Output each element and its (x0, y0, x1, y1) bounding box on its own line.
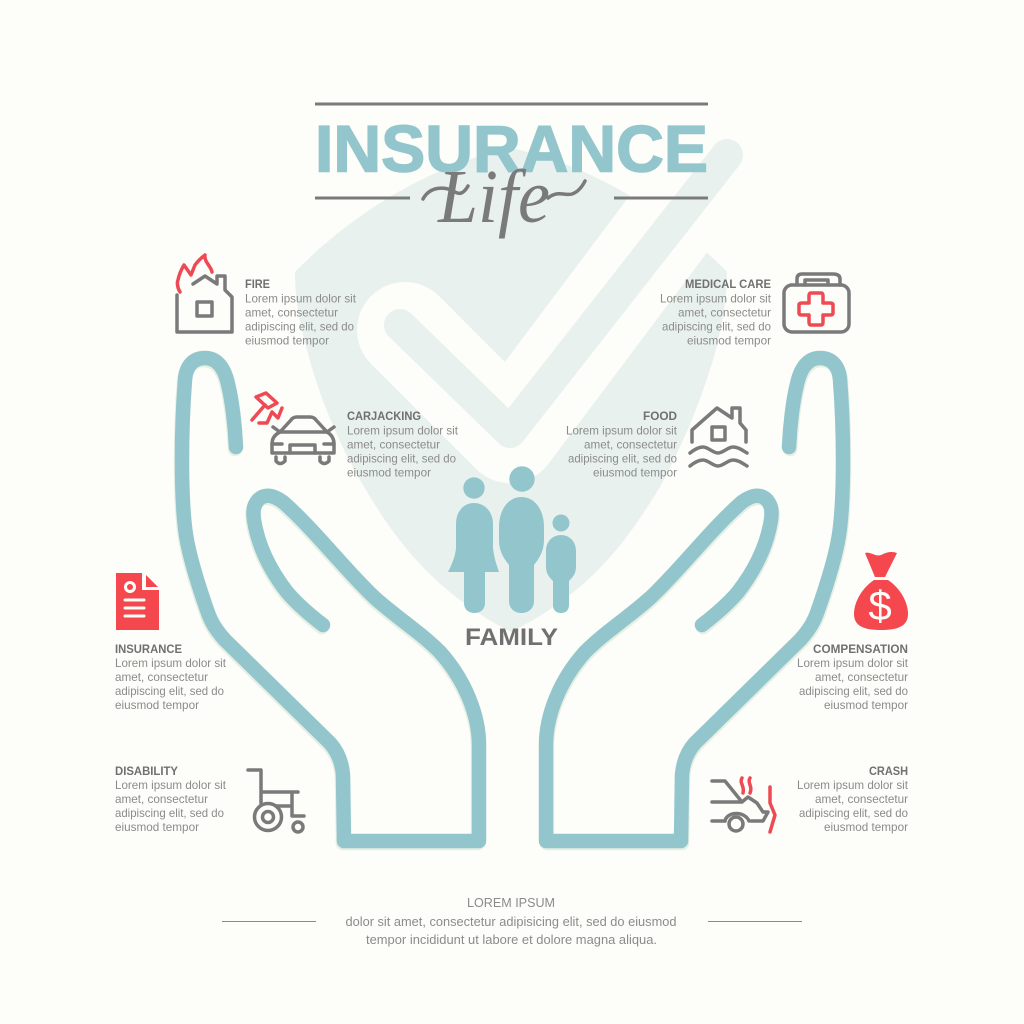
text block: compensation: Lorem ipsum dolor sit (797, 656, 909, 670)
footer text (222, 895, 802, 947)
text block: disability: eiusmod tempor (115, 820, 199, 834)
icon: crashed car (712, 778, 775, 832)
text block: medical care (660, 277, 772, 348)
background shield with check mark (295, 62, 790, 632)
text block: compensation: amet, consectetur (815, 670, 908, 684)
text block: food: Lorem ipsum dolor sit (566, 424, 678, 438)
icon: medical kit (784, 274, 849, 332)
text block: carjacking: CARJACKING (347, 409, 421, 423)
icon: insurance document (116, 573, 159, 630)
text block: fire: Lorem ipsum dolor sit (245, 292, 357, 306)
text block: insurance: eiusmod tempor (115, 698, 199, 712)
text block: carjacking: Lorem ipsum dolor sit (347, 424, 459, 438)
text block: food: amet, consectetur (584, 438, 677, 452)
text block: insurance: INSURANCE (115, 642, 182, 656)
text block: crash: eiusmod tempor (824, 820, 908, 834)
text block: crash (797, 764, 909, 834)
text block: fire: FIRE (245, 277, 270, 291)
text block: fire: eiusmod tempor (245, 334, 329, 348)
icon: money bag (854, 552, 908, 630)
text block: compensation: eiusmod tempor (824, 698, 908, 712)
right hand outline (546, 358, 844, 843)
text block: compensation (797, 642, 909, 712)
text block: disability: DISABILITY (115, 764, 178, 778)
text block: insurance: adipiscing elit, sed do (115, 684, 224, 698)
text block: compensation: COMPENSATION (813, 642, 908, 656)
footer text: LOREM IPSUM (467, 895, 555, 910)
footer text: dolor sit amet, consectetur adipisicing elit, sed do eiusmod (346, 914, 676, 929)
text block: carjacking: amet, consectetur (347, 438, 440, 452)
icon: money bag: $ (868, 582, 892, 629)
text block: medical care: Lorem ipsum dolor sit (660, 292, 772, 306)
text block: crash: CRASH (869, 764, 908, 778)
text block: medical care: eiusmod tempor (687, 334, 771, 348)
text block: crash: adipiscing elit, sed do (799, 806, 908, 820)
family label: FAMILY (465, 624, 558, 651)
text block: disability: amet, consectetur (115, 792, 208, 806)
text block: fire (245, 277, 357, 348)
title: Life (437, 155, 550, 239)
text block: medical care: amet, consectetur (678, 306, 771, 320)
text block: food: FOOD (643, 409, 677, 423)
text block: medical care: MEDICAL CARE (685, 277, 771, 291)
left hand outline (181, 358, 479, 843)
text block: food (566, 409, 678, 480)
icon: car and hammer (252, 393, 334, 464)
text block: fire: amet, consectetur (245, 306, 338, 320)
text block: compensation: adipiscing elit, sed do (799, 684, 908, 698)
text block: insurance: Lorem ipsum dolor sit (115, 656, 227, 670)
icon: wheelchair (248, 770, 304, 832)
text block: disability: Lorem ipsum dolor sit (115, 778, 227, 792)
text block: insurance: amet, consectetur (115, 670, 208, 684)
text block: food: eiusmod tempor (593, 466, 677, 480)
text block: carjacking: adipiscing elit, sed do (347, 452, 456, 466)
text block: insurance (115, 642, 227, 712)
icon: flooded house (690, 408, 747, 466)
icon: house on fire (177, 255, 232, 332)
text block: crash: amet, consectetur (815, 792, 908, 806)
text block: disability: adipiscing elit, sed do (115, 806, 224, 820)
text block: carjacking (347, 409, 459, 480)
family figures (448, 466, 576, 613)
text block: disability (115, 764, 227, 834)
text block: medical care: adipiscing elit, sed do (662, 320, 771, 334)
footer text: tempor incididunt ut labore et dolore magna aliqua. (366, 932, 657, 947)
text block: crash: Lorem ipsum dolor sit (797, 778, 909, 792)
title: INSURANCE (315, 112, 708, 186)
text block: food: adipiscing elit, sed do (568, 452, 677, 466)
title (315, 102, 708, 239)
text block: fire: adipiscing elit, sed do (245, 320, 354, 334)
text block: carjacking: eiusmod tempor (347, 466, 431, 480)
